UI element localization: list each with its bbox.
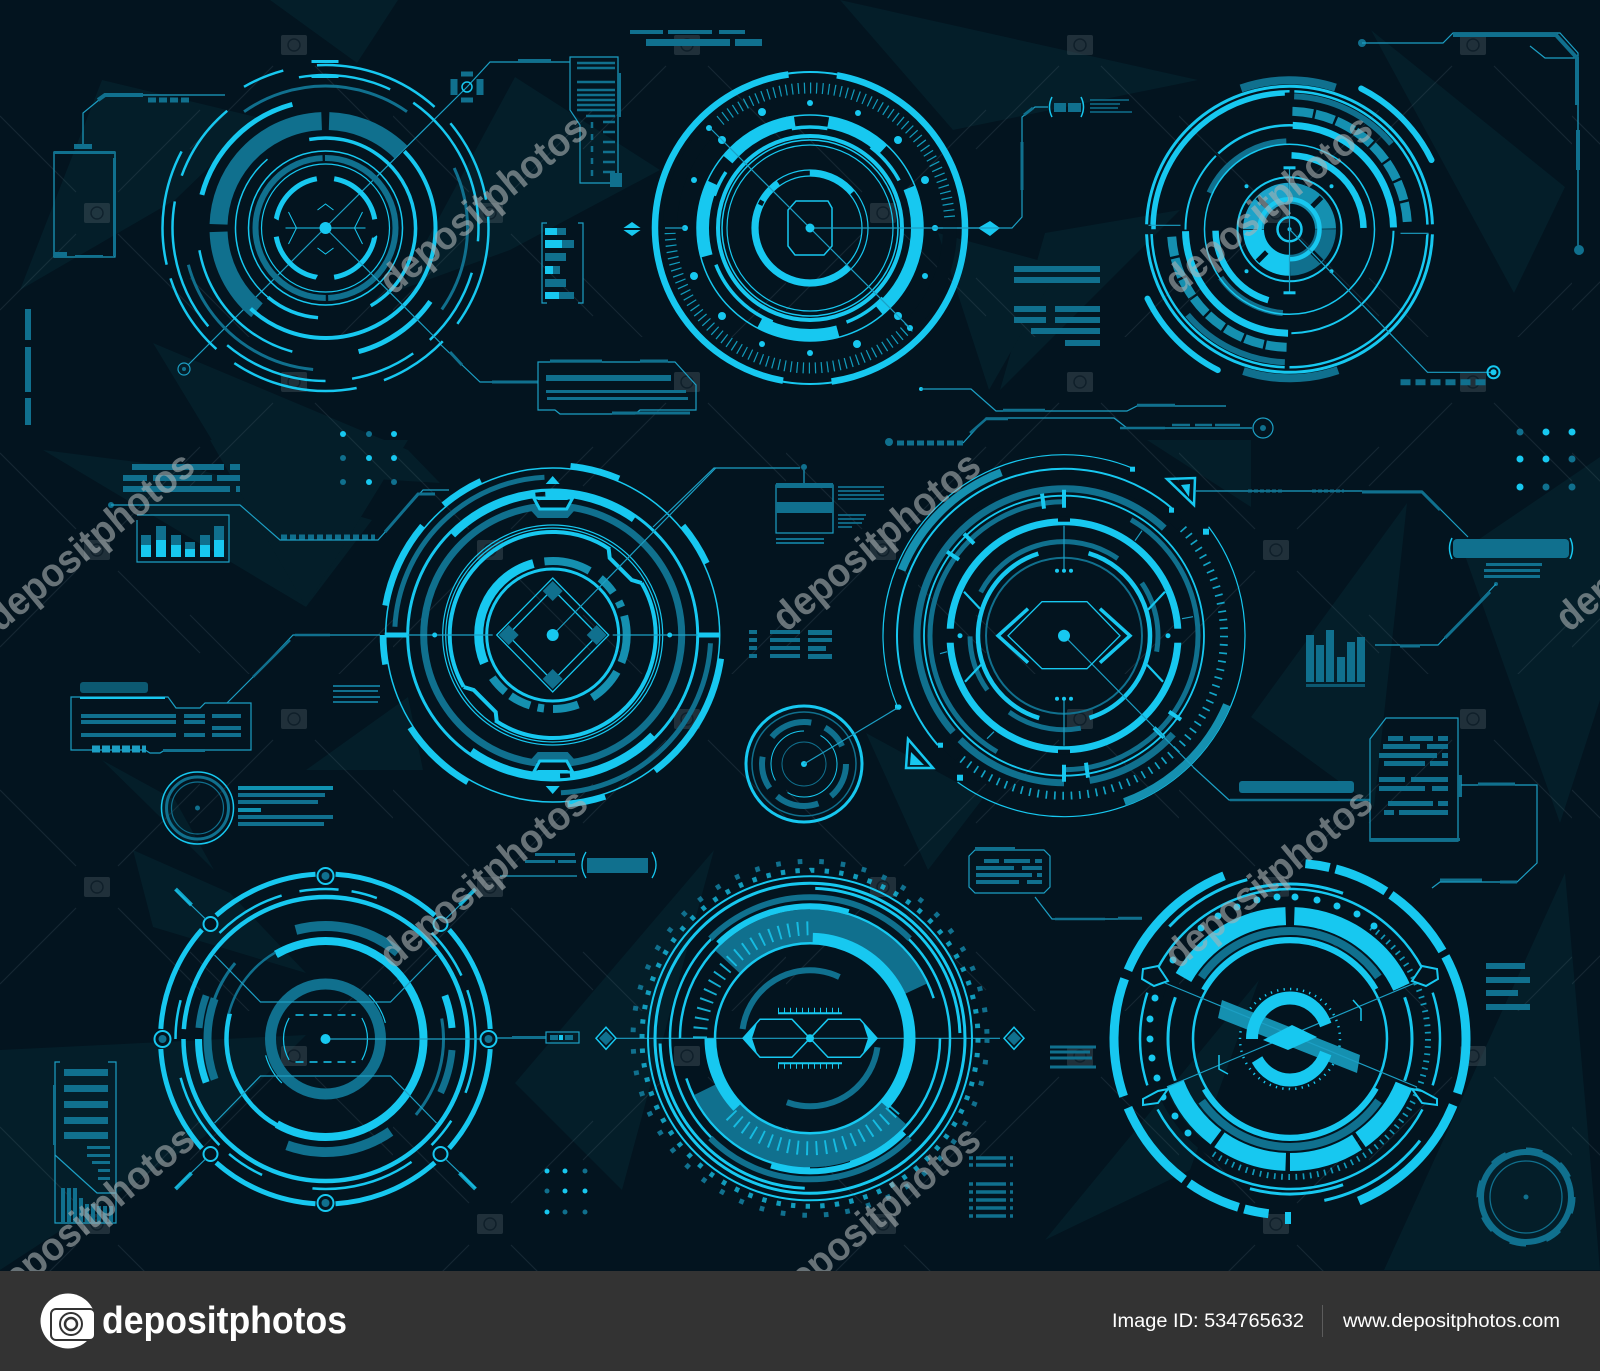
circle two <box>630 48 1000 408</box>
watermark text: depositphotos <box>764 443 989 640</box>
radial bars <box>947 490 1181 782</box>
dot grid: upper left <box>340 431 397 485</box>
circle nine <box>1057 806 1523 1272</box>
watermark text: depositphotos <box>1156 780 1381 977</box>
website: www.depositphotos.com <box>1342 1311 1560 1332</box>
tick ring <box>838 410 1290 861</box>
connector and panel: left of circle four <box>71 635 380 753</box>
connector: top right <box>1358 33 1584 255</box>
circle four <box>352 434 754 836</box>
data panel: top column <box>570 57 622 187</box>
circle one <box>103 5 548 451</box>
dial sectors <box>1254 193 1326 265</box>
circle three <box>1077 17 1502 442</box>
image id: Image ID: 534765632 <box>1112 1311 1304 1332</box>
gear circle: bottom right <box>1478 1149 1574 1245</box>
bar chart: right <box>1306 630 1365 687</box>
dot grid: bottom middle <box>544 1168 588 1214</box>
connector: right of circle seven <box>497 1032 579 1043</box>
logo wordmark: depositphotos <box>102 1300 347 1342</box>
bar list: left of circle two <box>542 223 583 303</box>
footer bar <box>0 1271 1600 1371</box>
icon: camera logo <box>40 1294 96 1348</box>
text bars: right of circle nine <box>1486 963 1530 1010</box>
small panel: above middle <box>653 464 884 544</box>
connector: long circuit lines <box>885 387 1273 446</box>
bars: between circle four and five <box>749 630 832 659</box>
document panel and connectors <box>1193 718 1537 888</box>
bars: top dashes <box>630 30 762 46</box>
icon: triangle markers on circle five <box>906 478 1195 768</box>
watermark text: depositphotos <box>1156 106 1381 303</box>
data panel: lower bar box <box>439 343 696 414</box>
connector: right pill panel <box>1195 491 1572 646</box>
dot grid: upper right <box>1516 428 1576 490</box>
connector: dot and target icon <box>178 59 570 375</box>
watermark text: depositphotos <box>764 1117 989 1314</box>
circle eight <box>596 839 1024 1238</box>
data panel: bottom left <box>53 1062 116 1223</box>
connector: right of circle two <box>932 97 1132 236</box>
dots <box>682 100 938 356</box>
lines: stacked text bars <box>1014 266 1100 346</box>
tick marks <box>655 883 965 1194</box>
watermark text: depositphotos <box>371 780 596 977</box>
lines: beside circle eight <box>969 1047 1096 1216</box>
icon: diamond left of circle two <box>620 222 644 236</box>
circle five <box>811 382 1317 889</box>
bars: left vertical dashes <box>25 309 31 425</box>
pill panel: above circle seven <box>500 852 656 878</box>
arrow tips <box>1142 966 1438 1105</box>
tick ring <box>1098 847 1482 1231</box>
circle seven <box>113 827 538 1251</box>
watermark text: depositphotos <box>371 106 596 303</box>
divider <box>1322 1305 1323 1337</box>
tick ring <box>663 81 957 375</box>
mini circle with lead <box>746 704 902 822</box>
dot row <box>1146 894 1378 1136</box>
text bars and bar chart: left of circle four <box>108 464 449 562</box>
small circle with text bars <box>162 772 333 844</box>
text panel: above circle eight <box>969 847 1142 919</box>
connector: battery panel <box>54 95 225 257</box>
